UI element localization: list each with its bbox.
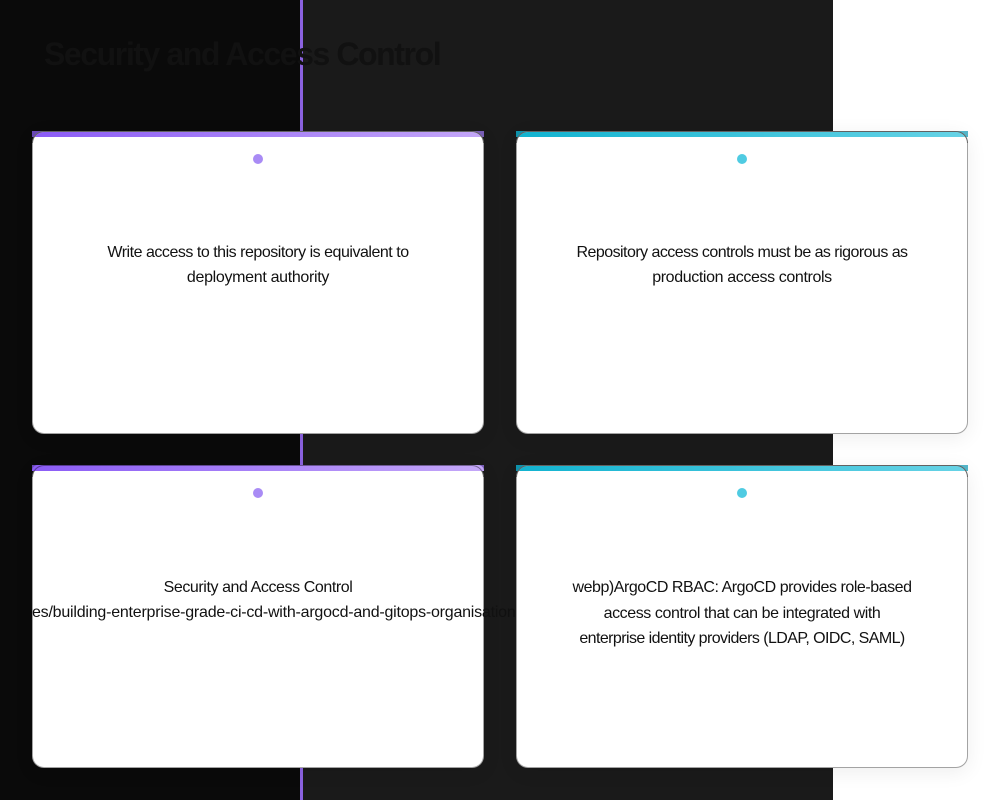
card text: Repository access controls must be as rigorous as	[576, 244, 908, 261]
background: main dark band	[303, 0, 833, 800]
panel: card bottom right	[516, 465, 968, 772]
icon: purple dot	[253, 154, 263, 164]
card text: webp)ArgoCD RBAC: ArgoCD provides role-based	[572, 579, 912, 596]
icon: cyan dot	[737, 154, 747, 164]
card text: enterprise identity providers (LDAP, OIDC, SAML)	[579, 630, 905, 647]
card text: Security and Access Control	[164, 579, 352, 596]
background: left dark band	[0, 0, 300, 800]
vertical timeline line	[300, 0, 303, 800]
card text	[572, 579, 912, 647]
card text: access control that can be integrated with	[604, 604, 880, 622]
card text: deployment authority	[187, 269, 329, 286]
icon: purple dot	[253, 488, 263, 498]
title: Security and Access Control	[44, 36, 440, 72]
card text	[107, 244, 409, 286]
card text	[32, 579, 516, 621]
panel: card bottom left	[32, 465, 516, 770]
card text: Write access to this repository is equivalent to	[107, 244, 409, 261]
card text: production access controls	[652, 269, 832, 286]
icon: cyan dot	[737, 488, 747, 498]
card text	[576, 244, 908, 286]
panel: card top left	[32, 131, 484, 436]
card text: es/building-enterprise-grade-ci-cd-with-argocd-and-gitops-organisation	[32, 604, 516, 621]
panel: card top right	[516, 131, 968, 438]
